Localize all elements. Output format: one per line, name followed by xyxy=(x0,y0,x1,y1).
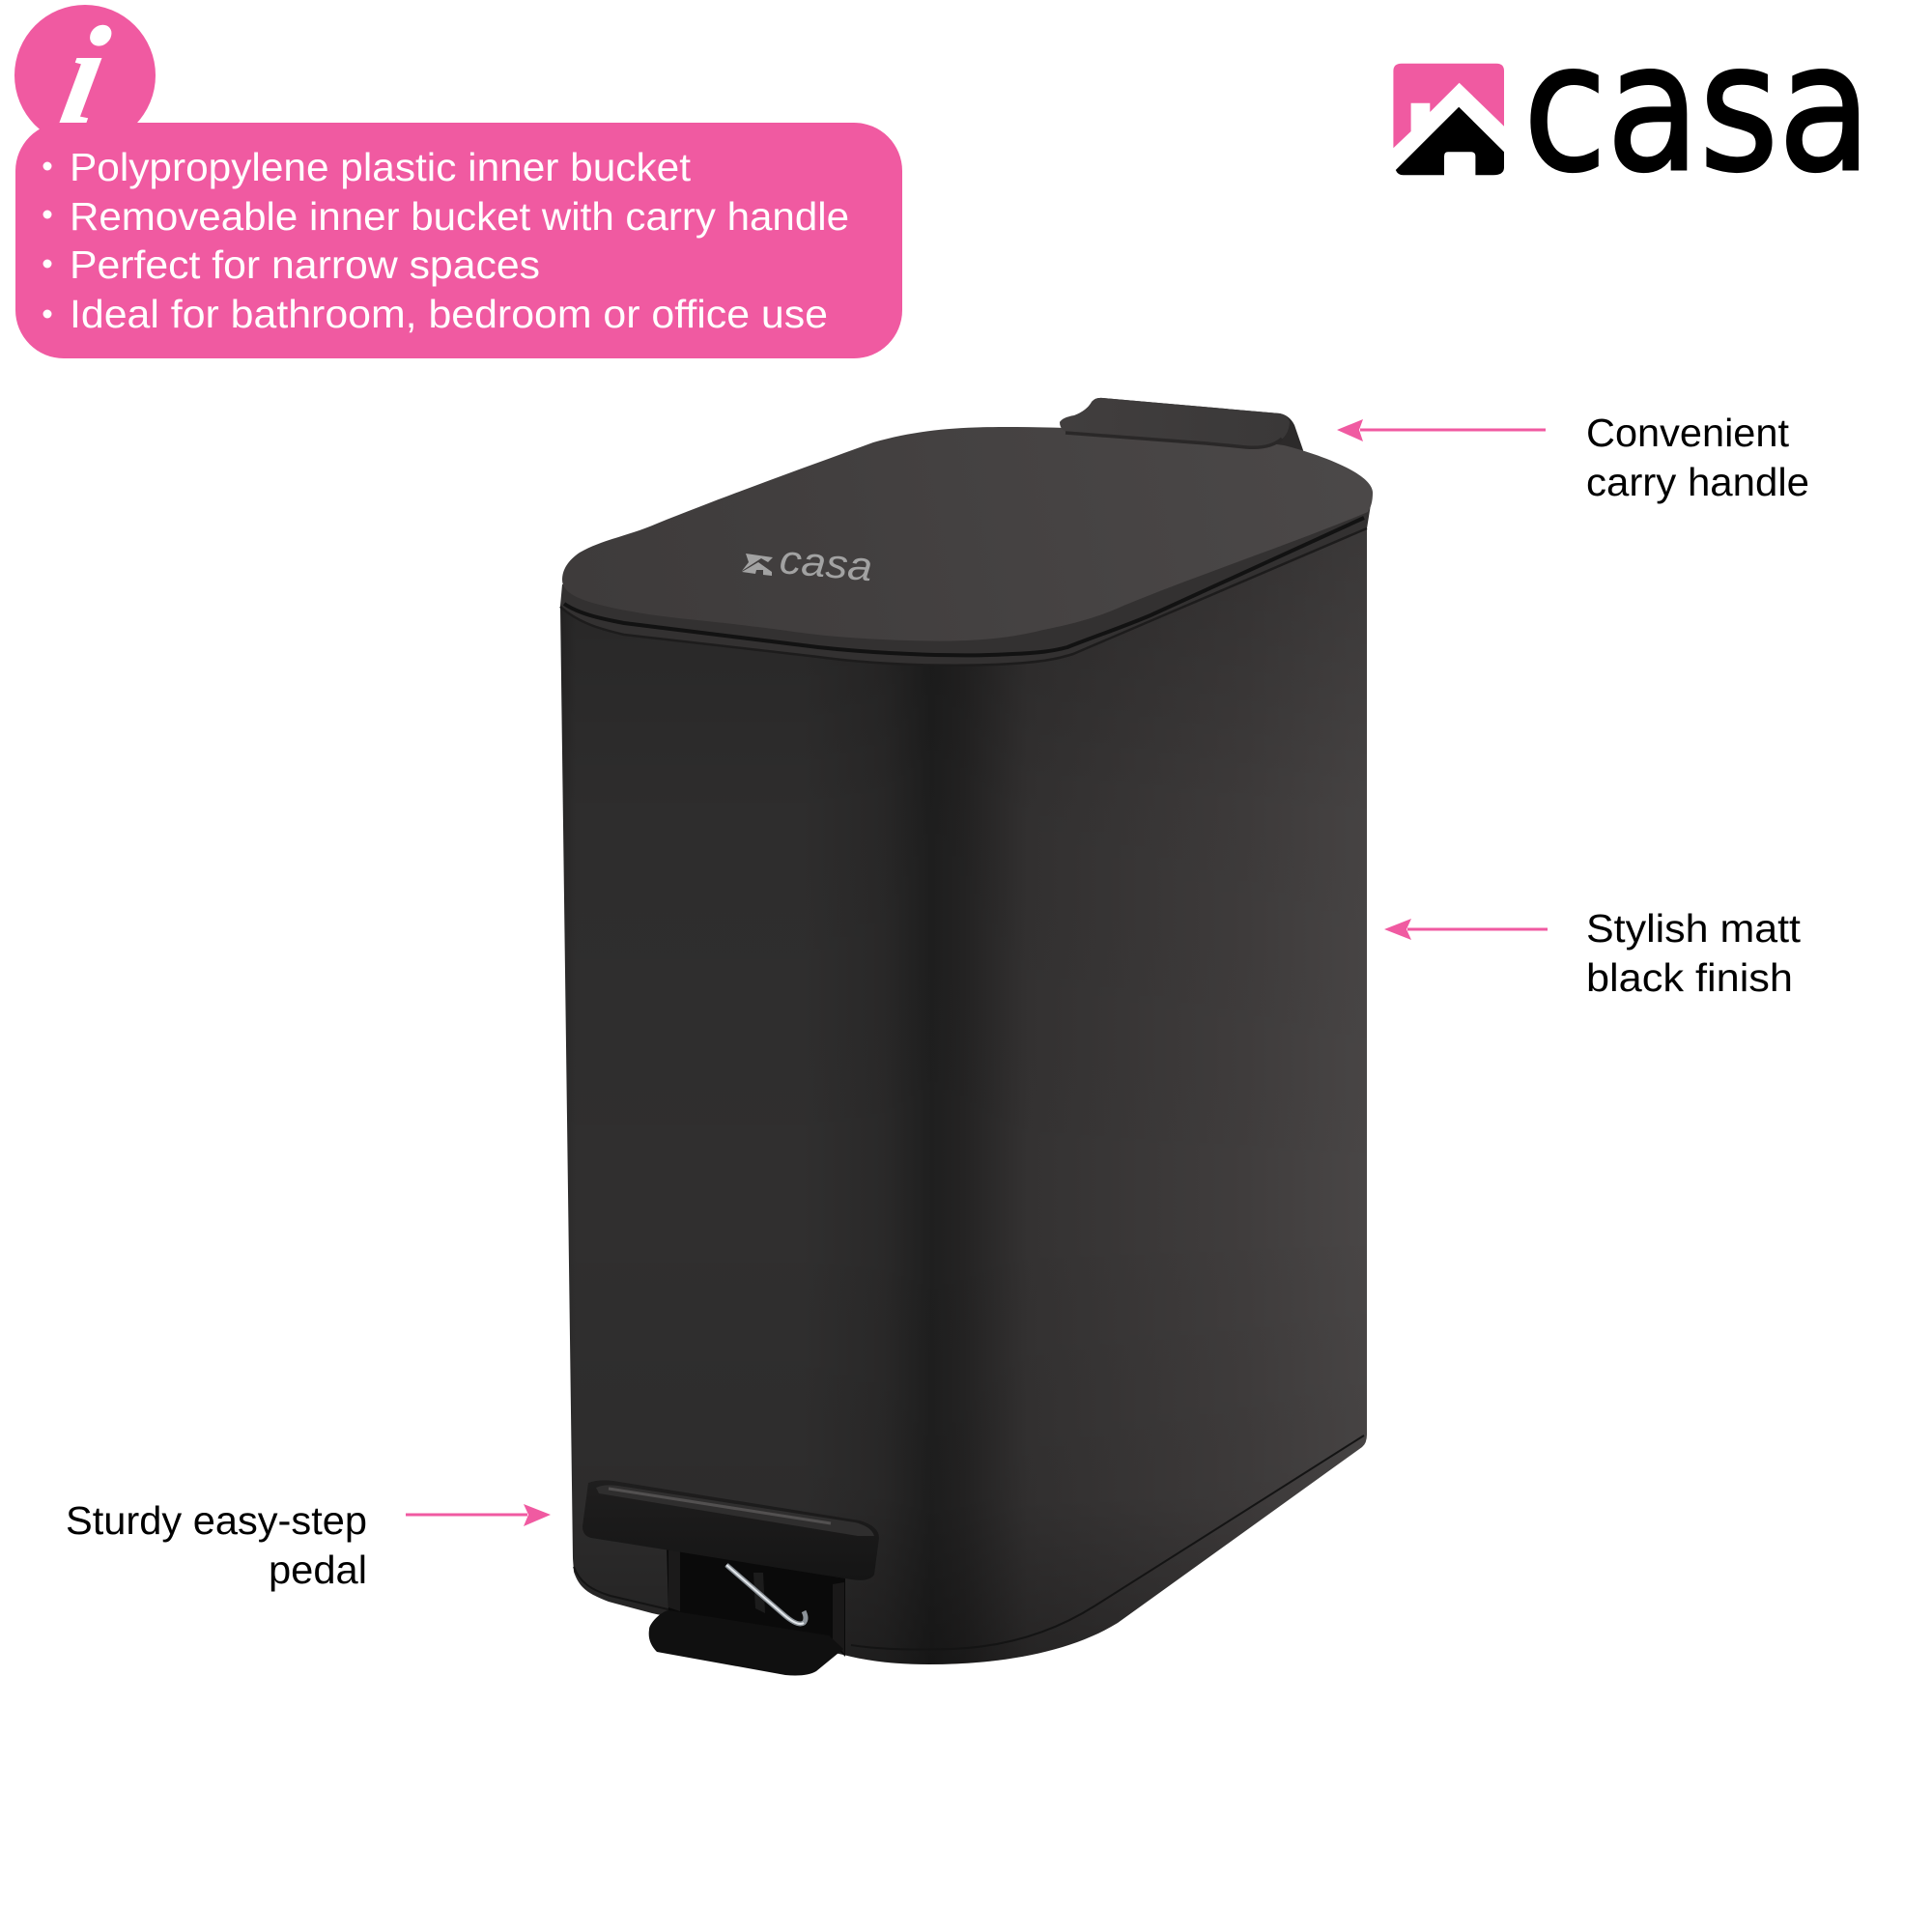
bin body xyxy=(560,522,1367,1664)
callout text: Convenient xyxy=(1586,411,1790,455)
callout text xyxy=(66,1498,367,1592)
callout: matt finish xyxy=(1384,906,1802,1000)
feature list xyxy=(43,145,849,336)
icon: house mark xyxy=(1393,64,1504,175)
callout text xyxy=(1586,411,1809,504)
pedal opening xyxy=(667,1546,845,1657)
callout text: carry handle xyxy=(1586,460,1809,504)
feature list: Perfect for narrow spaces xyxy=(70,242,540,287)
callout text: pedal xyxy=(269,1548,367,1592)
lid logo xyxy=(742,536,874,589)
feature list: Ideal for bathroom, bedroom or office use xyxy=(70,292,828,336)
arrow: to body xyxy=(1384,919,1548,940)
pedal foot xyxy=(649,1610,843,1675)
panel: product features xyxy=(14,0,902,358)
icon: info circle xyxy=(14,0,156,154)
pedal top bar xyxy=(582,1480,879,1580)
callout: pedal xyxy=(66,1498,551,1592)
arrow: to pedal xyxy=(406,1504,551,1526)
lid rim xyxy=(560,493,1373,666)
product: pedal bin xyxy=(560,398,1373,1675)
handle post xyxy=(1092,398,1303,464)
callout text: black finish xyxy=(1586,955,1793,1000)
callout text: Stylish matt xyxy=(1586,906,1802,951)
carry handle xyxy=(1060,398,1290,447)
callout text: Sturdy easy-step xyxy=(66,1498,367,1543)
arrow: to handle xyxy=(1337,419,1546,441)
callout text xyxy=(1586,906,1802,1000)
feature list: Polypropylene plastic inner bucket xyxy=(70,145,692,189)
wordmark: casa xyxy=(1523,6,1871,212)
callout: carry handle xyxy=(1337,411,1809,504)
feature list: Removeable inner bucket with carry handle xyxy=(70,194,849,239)
logo: casa xyxy=(1393,6,1871,212)
feature pill background xyxy=(15,123,902,358)
lid logo: casa xyxy=(778,536,874,589)
spring xyxy=(726,1565,806,1624)
icon: info circle: i xyxy=(50,0,120,154)
lid xyxy=(562,427,1373,641)
